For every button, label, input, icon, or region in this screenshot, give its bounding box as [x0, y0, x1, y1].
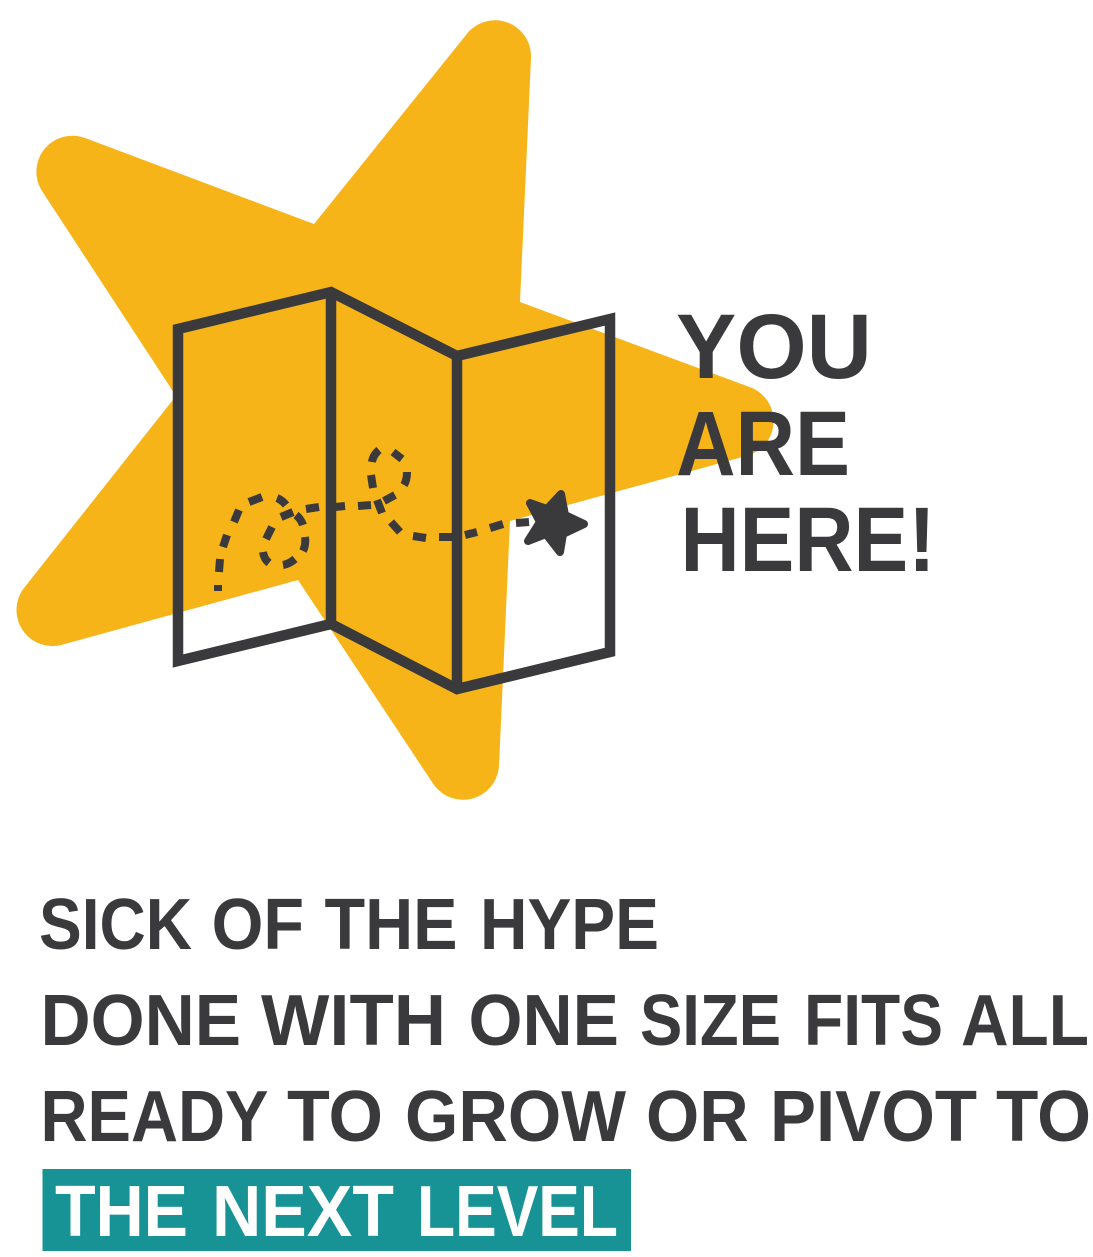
text block: tagline: SIZE [640, 981, 781, 1061]
callout: the next level: THE [55, 1172, 188, 1252]
icon: small star marker [528, 494, 584, 552]
text block: tagline: ONE [468, 981, 619, 1061]
icon: folded map [178, 292, 610, 689]
text block: tagline: FITS [804, 981, 943, 1061]
text block: tagline: SICK [39, 885, 192, 965]
text block: tagline [39, 885, 1091, 1157]
heading: you are here [676, 296, 936, 591]
heading: you are here: ARE [676, 393, 850, 495]
text block: tagline: TO [287, 1077, 383, 1157]
callout: the next level [42, 1169, 631, 1252]
heading: you are here: YOU [676, 296, 872, 398]
text block: tagline: TO [996, 1077, 1091, 1157]
text block: tagline: GROW [405, 1077, 626, 1157]
text block: tagline: PIVOT [770, 1077, 977, 1157]
text block: tagline: DONE [40, 981, 241, 1061]
callout: the next level: NEXT [212, 1172, 394, 1252]
text block: tagline: HYPE [480, 885, 659, 965]
text block: tagline: OR [646, 1077, 749, 1157]
callout: the next level: LEVEL [417, 1172, 618, 1252]
icon: yellow star [16, 20, 774, 800]
text block: tagline: THE [324, 885, 458, 965]
text block: tagline: READY [40, 1077, 268, 1157]
icon: dashed route [218, 450, 529, 591]
text block: tagline: WITH [261, 981, 446, 1061]
text block: tagline: OF [212, 885, 304, 965]
heading: you are here: HERE! [680, 489, 936, 591]
